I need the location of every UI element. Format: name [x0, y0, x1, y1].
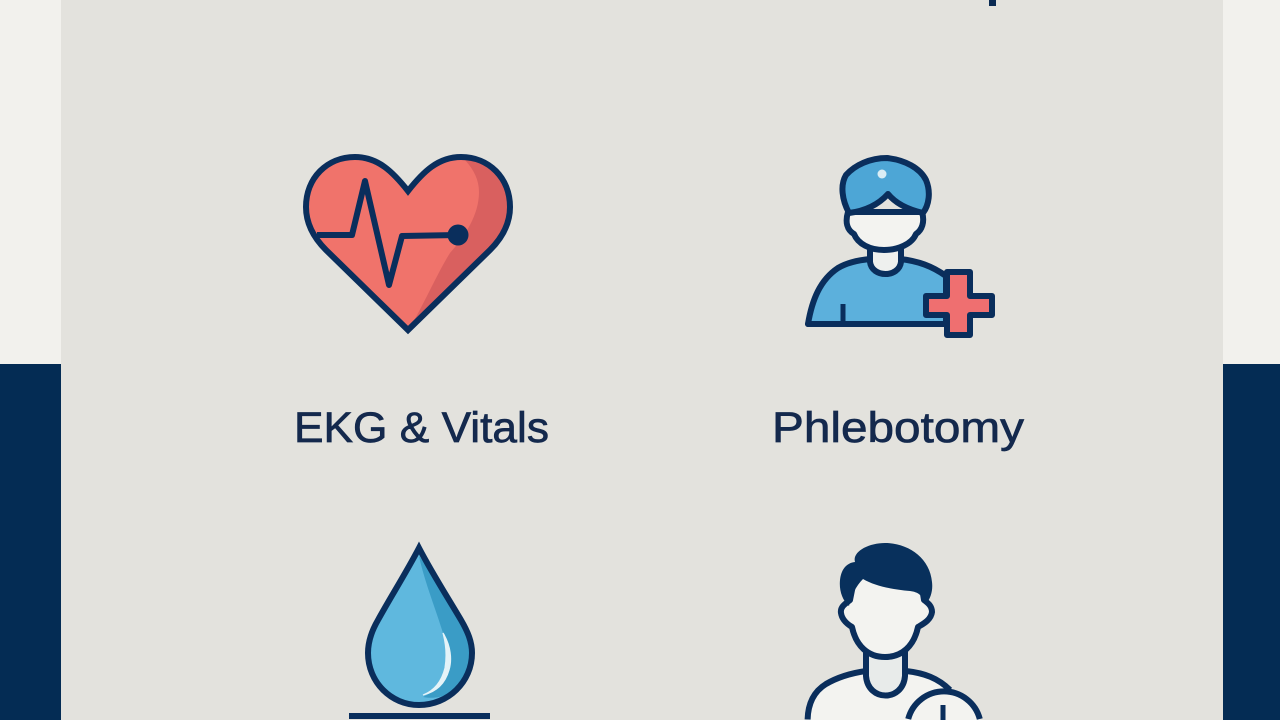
label: EKG & Vitals: EKG & Vitals	[294, 404, 549, 452]
icon: person with clock badge	[808, 543, 980, 720]
heading fragment cropped at top	[989, 0, 996, 6]
icon: phlebotomist with medical cross	[808, 158, 992, 335]
icon: water drop on a line	[349, 548, 490, 719]
icon: heart with EKG trace	[306, 157, 510, 330]
label: Phlebotomy: Phlebotomy	[772, 404, 1025, 452]
